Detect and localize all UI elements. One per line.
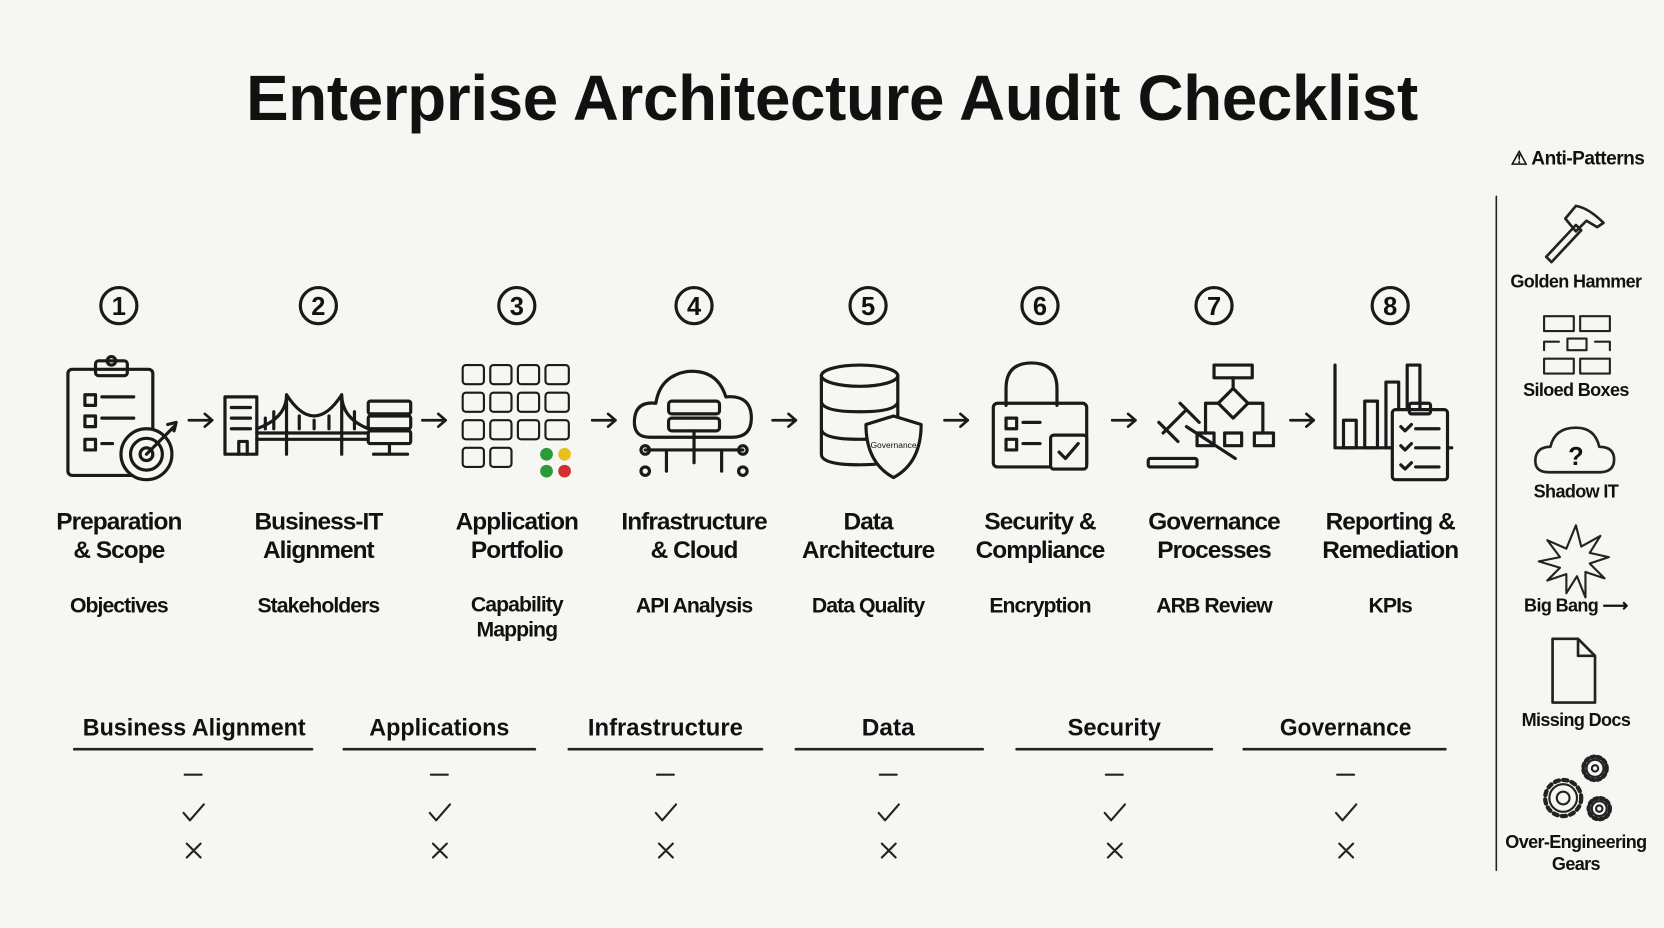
step 1 text: Preparation bbox=[56, 507, 181, 535]
step 2 text: Alignment bbox=[263, 536, 374, 564]
icon: cloud server bbox=[634, 371, 751, 475]
checklist table: Infrastructure bbox=[588, 714, 743, 741]
process flow bbox=[66, 286, 1454, 482]
icon: starburst bbox=[1539, 525, 1609, 597]
step number circles: 5 bbox=[861, 293, 875, 321]
icon: cloud question bbox=[1535, 428, 1614, 472]
checklist table: Applications bbox=[369, 714, 509, 741]
step 2 text: Stakeholders bbox=[257, 594, 379, 618]
step 7 text bbox=[1148, 507, 1280, 618]
step number circles: 4 bbox=[687, 293, 702, 321]
step 1 text: Objectives bbox=[70, 594, 168, 618]
step number circles: 7 bbox=[1207, 293, 1221, 321]
icon: clipboard target bbox=[68, 357, 176, 480]
step 4 text: API Analysis bbox=[636, 594, 752, 618]
sidebar labels: Gears bbox=[1552, 854, 1600, 874]
step 5 text bbox=[802, 507, 934, 618]
step 3 text: Capability bbox=[471, 593, 563, 617]
step 8 text: Remediation bbox=[1322, 536, 1458, 564]
step 3 text: Application bbox=[456, 507, 578, 535]
icon: padlock bbox=[993, 363, 1087, 469]
checklist table: Data bbox=[862, 714, 915, 741]
icon: hammer bbox=[1546, 206, 1604, 262]
checklist table: Business Alignment bbox=[83, 714, 306, 741]
sidebar labels: Siloed Boxes bbox=[1523, 380, 1629, 400]
step 6 text: Security & bbox=[984, 507, 1096, 535]
step number circles: 1 bbox=[112, 293, 126, 321]
icon: app grid bbox=[463, 365, 571, 478]
icon: cloud question: ? bbox=[1568, 443, 1584, 471]
step 2 text bbox=[254, 507, 383, 618]
icon: bar chart clipboard bbox=[1335, 365, 1452, 480]
step number circles: 3 bbox=[510, 293, 524, 321]
step 6 text: Compliance bbox=[976, 536, 1104, 564]
title: Enterprise Architecture Audit Checklist bbox=[246, 63, 1418, 134]
step 3 text: Portfolio bbox=[471, 536, 563, 564]
step 8 text: Reporting & bbox=[1326, 507, 1455, 535]
step 3 text bbox=[456, 507, 578, 642]
sidebar labels: Big Bang ⟶ bbox=[1524, 595, 1628, 616]
step 8 text: KPIs bbox=[1369, 594, 1412, 618]
sidebar labels: Shadow IT bbox=[1534, 482, 1618, 502]
step 7 text: Governance bbox=[1148, 507, 1280, 535]
icon: building bridge server bbox=[225, 395, 411, 454]
sidebar header: ⚠ Anti-Patterns bbox=[1511, 148, 1644, 169]
step number circles: 8 bbox=[1383, 293, 1397, 321]
step 8 text bbox=[1322, 507, 1458, 618]
step 3 text: Mapping bbox=[477, 619, 557, 642]
arrows bbox=[189, 414, 1314, 427]
anti-patterns sidebar bbox=[1496, 148, 1646, 874]
checklist table: Governance bbox=[1280, 714, 1411, 741]
sidebar labels: Missing Docs bbox=[1522, 710, 1630, 730]
icon: database shield bbox=[821, 365, 921, 478]
step 2 text: Business-IT bbox=[254, 507, 382, 535]
step 1 text: & Scope bbox=[73, 536, 164, 564]
step number circles bbox=[101, 288, 1408, 324]
step 4 text bbox=[621, 507, 767, 618]
icon: gears bbox=[1545, 757, 1610, 819]
sidebar labels bbox=[1505, 272, 1646, 874]
step 5 text: Architecture bbox=[802, 536, 934, 564]
step titles bbox=[56, 507, 1458, 642]
icon: gavel flow bbox=[1148, 365, 1273, 467]
step 7 text: ARB Review bbox=[1156, 594, 1272, 618]
checklist table: Security bbox=[1068, 714, 1161, 741]
step 6 text: Encryption bbox=[989, 594, 1091, 618]
step 6 text bbox=[976, 507, 1104, 618]
step 1 text bbox=[56, 507, 181, 618]
icon: siloed boxes bbox=[1544, 316, 1610, 374]
step 5 text: Data bbox=[844, 507, 893, 535]
step 4 text: Infrastructure bbox=[621, 507, 767, 535]
icon: database shield: Governance bbox=[870, 440, 917, 450]
sidebar labels: Over-Engineering bbox=[1505, 832, 1646, 852]
icon: document bbox=[1553, 639, 1595, 703]
step 4 text: & Cloud bbox=[651, 536, 737, 564]
sidebar labels: Golden Hammer bbox=[1510, 272, 1641, 292]
step 7 text: Processes bbox=[1157, 536, 1271, 564]
step 5 text: Data Quality bbox=[812, 594, 924, 618]
step number circles: 6 bbox=[1033, 293, 1047, 321]
step number circles: 2 bbox=[311, 293, 325, 321]
